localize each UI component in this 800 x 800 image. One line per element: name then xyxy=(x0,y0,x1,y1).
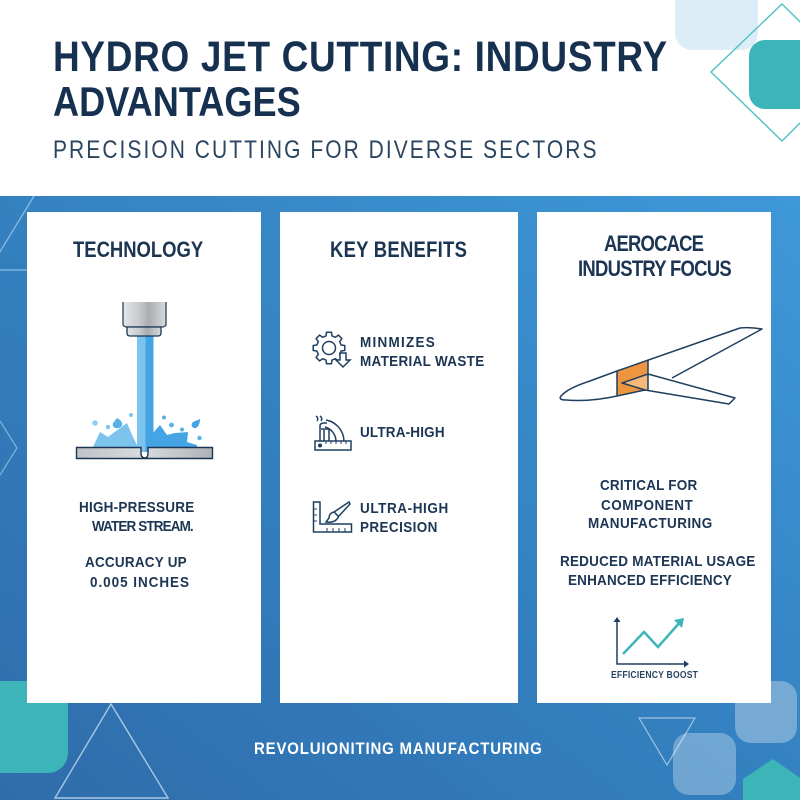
text: reduced usage and efficiency xyxy=(560,553,755,589)
text: minimizes waste xyxy=(360,334,484,370)
chart: efficiency boost: EFFICIENCY BOOST xyxy=(611,669,698,681)
text: critical for component manufacturing: COMPONENT xyxy=(601,497,693,514)
text: ultra-high precision: ULTRA-HIGH xyxy=(360,500,448,517)
title: ADVANTAGES xyxy=(53,80,301,126)
text: water stream: HIGH-PRESSURE xyxy=(79,499,194,516)
text: accuracy: ACCURACY UP xyxy=(85,554,187,571)
title xyxy=(53,33,667,126)
decoration: background shapes xyxy=(0,196,800,800)
icon: water jet nozzle xyxy=(76,302,212,458)
title: HYDRO JET CUTTING: INDUSTRY xyxy=(53,33,667,81)
text: reduced usage and efficiency: ENHANCED EFFICIENCY xyxy=(568,572,732,589)
text: ultra-high: ULTRA-HIGH xyxy=(360,424,445,441)
text: critical for component manufacturing: CRITICAL FOR xyxy=(600,477,697,494)
subtitle: PRECISION CUTTING FOR DIVERSE SECTORS xyxy=(53,135,596,163)
header background xyxy=(0,0,800,196)
panel: technology xyxy=(27,212,261,703)
text: ultra-high precision: PRECISION xyxy=(360,519,437,536)
heading: aerospace industry focus xyxy=(578,233,732,281)
heading: key benefits: KEY BENEFITS xyxy=(330,239,467,262)
icon: aircraft wing xyxy=(560,328,762,404)
panel: key benefits xyxy=(280,212,518,703)
text: accuracy xyxy=(85,554,189,591)
text: minimizes waste: MINMIZES xyxy=(360,334,435,351)
icon: set square and brush xyxy=(314,502,352,532)
text: ultra-high precision xyxy=(360,500,448,536)
footer text: REVOLUIONITING MANUFACTURING xyxy=(254,740,542,758)
heading: aerospace industry focus: INDUSTRY FOCUS xyxy=(578,258,732,281)
text: minimizes waste: MATERIAL WASTE xyxy=(360,353,484,370)
text: water stream xyxy=(79,499,194,535)
decoration: header shapes xyxy=(675,0,800,141)
panel: aerospace focus xyxy=(537,212,771,703)
text: water stream: WATER STREAM. xyxy=(92,518,194,535)
text: critical for component manufacturing xyxy=(588,477,712,532)
blue background band xyxy=(0,196,800,800)
text: critical for component manufacturing: MANUFACTURING xyxy=(588,515,712,532)
heading: aerospace industry focus: AEROCACE xyxy=(604,233,704,256)
chart: efficiency boost xyxy=(611,617,698,681)
icon: gear with arrow xyxy=(313,332,350,367)
heading: technology: TECHNOLOGY xyxy=(73,239,204,262)
text: accuracy: 0.005 INCHES xyxy=(90,574,189,591)
icon: protractor and ruler xyxy=(315,416,351,450)
text: reduced usage and efficiency: REDUCED MATERIAL USAGE xyxy=(560,553,755,570)
